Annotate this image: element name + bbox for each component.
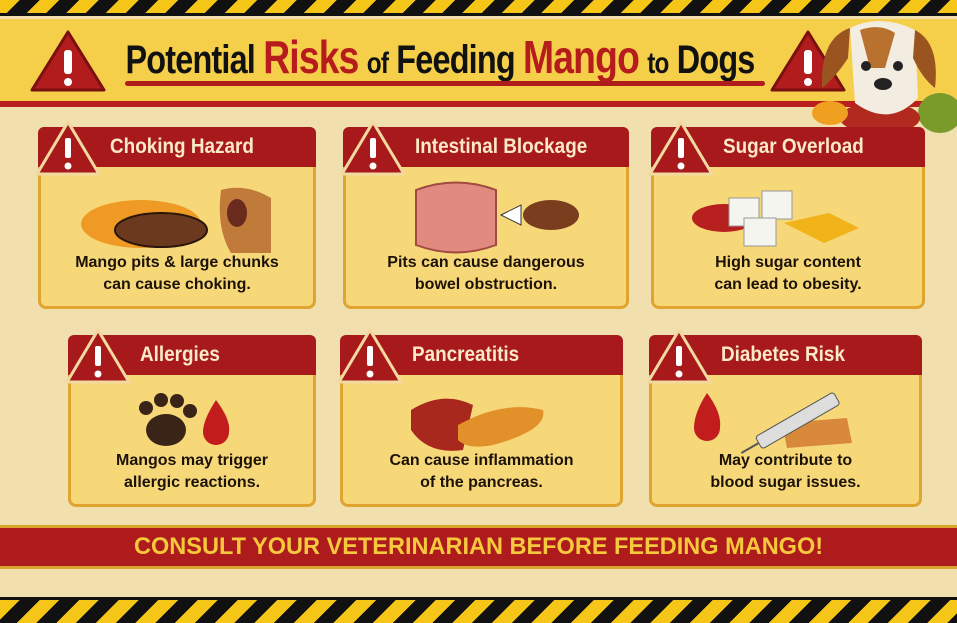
panel: sugar overload: High sugar content [715,254,861,271]
top hazard stripe [0,0,957,16]
panel: intestinal blockage [343,127,629,309]
icon: title warning left [30,30,106,92]
panel: intestinal blockage: bowel obstruction. [415,276,557,293]
panel: allergies [68,335,316,507]
panel: intestinal blockage: Pits can cause dangerous [387,254,585,271]
illustration: paw and blood drop [139,393,230,446]
panel: choking hazard [38,127,316,309]
panel: sugar overload: Sugar Overload [723,135,864,158]
illustration: sugar cubes and candy [692,190,859,246]
panel: pancreatitis: Can cause inflammation [389,452,574,469]
panel: pancreatitis: of the pancreas. [420,474,543,491]
panel: pancreatitis [340,335,623,507]
panel: pancreatitis: Pancreatitis [412,343,519,366]
title band [0,19,957,101]
panel: choking hazard: Mango pits & large chunks [75,254,279,271]
illustration: liver and pancreas [411,398,544,451]
panel: sugar overload [651,127,925,309]
panel: intestinal blockage: Intestinal Blockage [415,135,587,158]
panel: diabetes risk: Diabetes Risk [721,343,845,366]
panel: diabetes risk: blood sugar issues. [710,474,861,491]
illustration: blood drop and syringe [694,392,852,454]
panel: diabetes risk: May contribute to [719,452,852,469]
bottom hazard stripe [0,597,957,623]
illustration: intestines [415,182,579,254]
panel: allergies: Allergies [140,343,220,366]
footer banner [0,525,957,569]
footer banner: CONSULT YOUR VETERINARIAN BEFORE FEEDING MANGO! [134,533,823,560]
icon: title warning right [770,30,846,92]
illustration: mango and pit [81,188,271,253]
title: Potential Risks of Feeding Mango to Dogs [125,31,755,83]
panel: allergies: allergic reactions. [124,474,260,491]
panel: choking hazard: Choking Hazard [110,135,254,158]
icon: dog mascot [812,21,957,133]
panel: diabetes risk [649,335,922,507]
panel: allergies: Mangos may trigger [116,452,268,469]
panel: sugar overload: can lead to obesity. [714,276,862,293]
panel: choking hazard: can cause choking. [103,276,251,293]
